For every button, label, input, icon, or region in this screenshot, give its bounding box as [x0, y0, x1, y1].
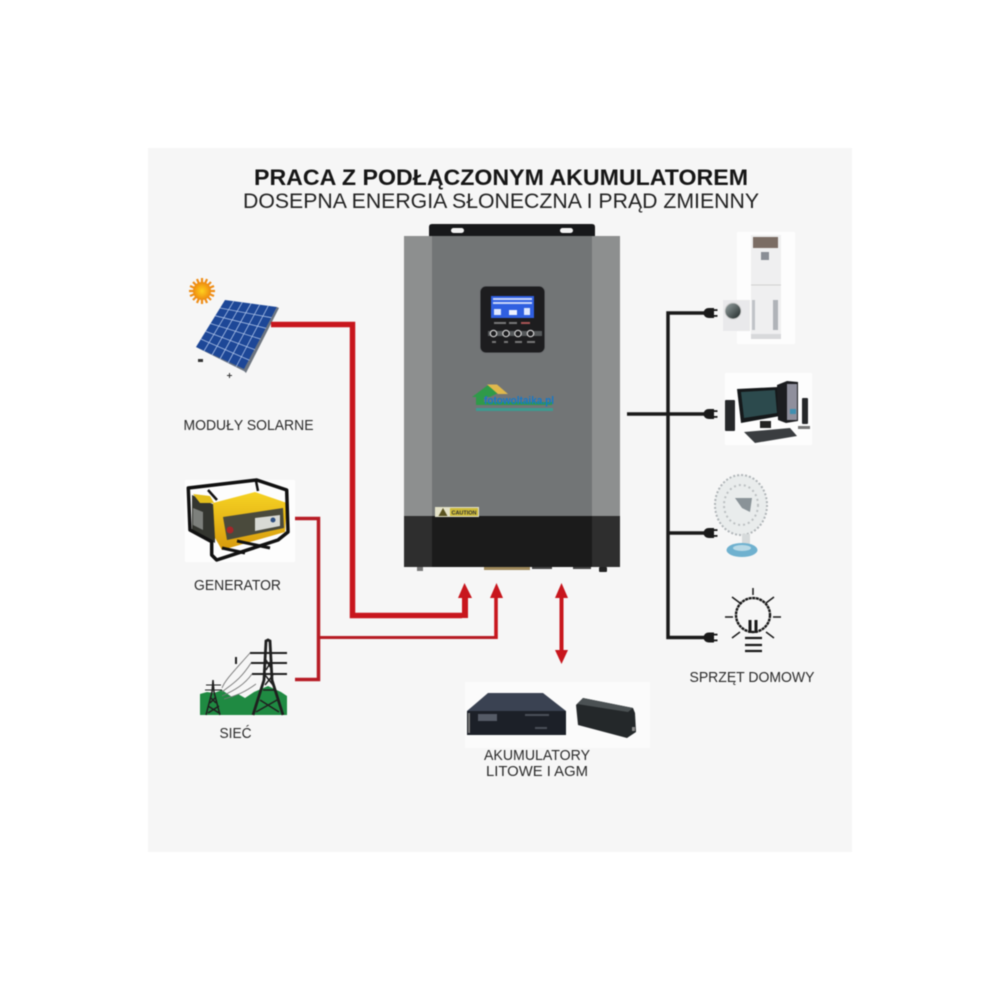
- icon: lithium battery rack: [467, 693, 566, 735]
- control panel: [480, 286, 545, 353]
- inverter: [404, 224, 620, 572]
- logo: fotowoltaika.pl: [484, 395, 554, 407]
- icon: power pylons: [200, 640, 287, 715]
- label: grid: SIEĆ: [220, 725, 252, 742]
- LCD screen: [491, 296, 534, 318]
- icon: AGM battery: [576, 698, 636, 738]
- label: batteries: LITOWE I AGM: [486, 763, 588, 780]
- title: DOSEPNA ENERGIA SŁONECZNA I PRĄD ZMIENNY: [243, 189, 759, 213]
- arrow: battery double: [555, 583, 568, 664]
- arrow: grid input: [490, 583, 503, 639]
- label: appliances: SPRZĘT DOMOWY: [690, 669, 814, 686]
- title: [243, 165, 759, 213]
- mounting bracket: [429, 224, 595, 238]
- plugs: [704, 308, 718, 642]
- caution label: CAUTION: [451, 510, 477, 516]
- label: batteries: [484, 747, 590, 780]
- panel: grid: [200, 640, 287, 742]
- inverter body: [404, 236, 620, 572]
- red wire: generator and grid to inverter: [295, 518, 503, 680]
- icon: solar panel: [196, 300, 279, 373]
- arrow: solar input: [458, 583, 472, 618]
- icon: light bulb: [725, 588, 781, 651]
- logo: [472, 384, 554, 411]
- label: generator: GENERATOR: [194, 577, 281, 594]
- buttons: [488, 330, 542, 337]
- panel: batteries: [465, 682, 650, 780]
- caution label: [435, 507, 479, 517]
- icon: generator: [185, 480, 295, 562]
- background panel: [148, 148, 852, 852]
- icon: sun: [189, 278, 215, 304]
- icon: computer: [725, 373, 812, 445]
- polarity marks: [198, 359, 232, 378]
- black wiring: [627, 313, 708, 638]
- label: solar: MODUŁY SOLARNE: [184, 417, 314, 434]
- title: PRACA Z PODŁĄCZONYM AKUMULATOREM: [254, 165, 748, 190]
- icon: air conditioner and washer: [723, 232, 795, 344]
- icon: fan: [715, 475, 767, 557]
- red wire: solar to inverter: [271, 324, 472, 618]
- label: batteries: AKUMULATORY: [484, 747, 590, 764]
- panel: home appliances: [690, 232, 814, 686]
- panel: generator: [185, 480, 295, 594]
- panel: solar modules: [184, 278, 314, 434]
